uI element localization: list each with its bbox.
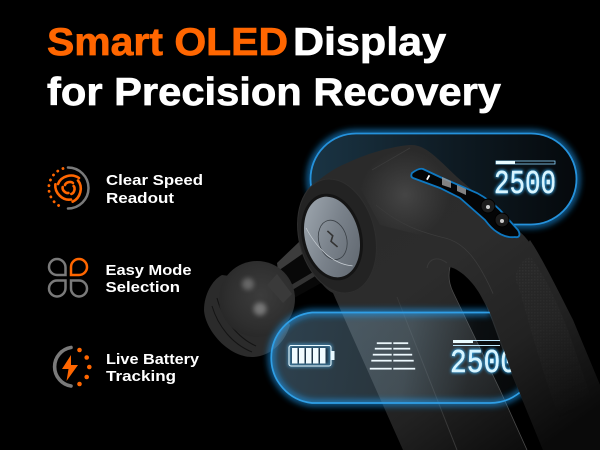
handle groove xyxy=(397,259,457,450)
massage gun xyxy=(204,145,600,450)
feature: clear speed readout xyxy=(49,168,203,208)
icon: four petals xyxy=(49,259,87,296)
label xyxy=(106,172,203,207)
title: Display xyxy=(293,21,446,64)
speed value: 2500 xyxy=(450,345,517,382)
ball head xyxy=(204,261,295,357)
label: Tracking xyxy=(106,368,176,385)
label xyxy=(106,351,200,385)
head crease xyxy=(372,148,500,310)
icon: mode levels xyxy=(370,342,415,369)
head ring xyxy=(286,171,388,301)
feature: live battery tracking xyxy=(55,348,200,386)
label: Selection xyxy=(106,279,180,296)
title: for Precision Recovery xyxy=(47,71,501,114)
icon: battery xyxy=(289,345,334,366)
icon: speed swirl xyxy=(49,168,88,208)
callout: top speed display xyxy=(310,133,577,225)
speed bar xyxy=(453,340,500,346)
title: Smart OLED xyxy=(47,21,288,64)
icon: battery bolt xyxy=(55,348,92,386)
speed value: 2500 xyxy=(494,166,556,203)
title xyxy=(47,21,501,114)
body and handles xyxy=(300,145,600,450)
speed bar xyxy=(496,161,555,164)
shaft xyxy=(267,241,332,303)
rear handle arm in front of callout xyxy=(487,240,572,400)
speed value: 2500 xyxy=(450,345,517,382)
label: Readout xyxy=(106,190,174,207)
gap edge highlight xyxy=(449,267,527,450)
label xyxy=(106,262,192,296)
callout: bottom battery and mode display xyxy=(271,312,525,403)
label: Clear Speed xyxy=(106,172,203,189)
label: Easy Mode xyxy=(106,262,192,279)
disc shadow xyxy=(292,187,372,287)
textured grip xyxy=(516,258,546,288)
display strip xyxy=(411,169,519,237)
label: Live Battery xyxy=(106,351,200,368)
body sheen xyxy=(347,145,480,240)
speed value: 2500 xyxy=(494,166,556,203)
feature: easy mode selection xyxy=(49,259,192,296)
silver disc with logo xyxy=(296,191,368,283)
